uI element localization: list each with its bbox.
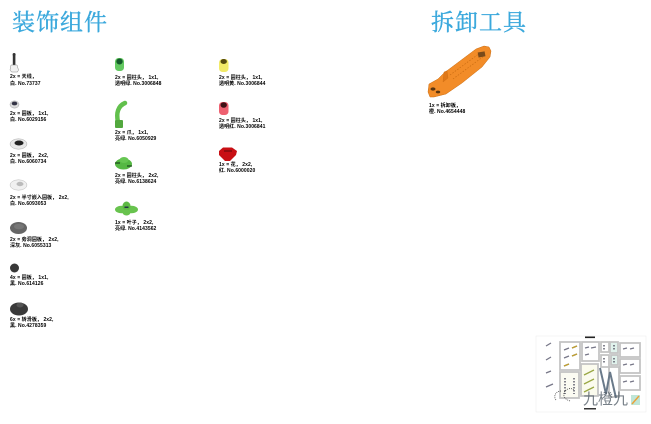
part: antenna: 2x = 天线， (10, 73, 37, 80)
part: transparent yellow cylinder: 2x = 圆柱头， 1x1, (219, 74, 263, 81)
part: bright green leaf (115, 202, 157, 232)
part: round plate 1x1: 2x = 圆板， 1x1, (10, 110, 49, 117)
part: orange brick separator tool: 橙. No.4654448 (429, 108, 465, 115)
thumbnail: parts overview page: 九橙九 (583, 391, 628, 408)
part: black sliding plate 2x2 (10, 302, 54, 329)
part: bright green flower plate 2x2: 亮绿. No.6138624 (115, 178, 157, 185)
part: bright green leaf: 亮绿. No.4143562 (115, 225, 157, 232)
part: transparent red cylinder: 透明红. No.3006841 (219, 123, 266, 130)
part: black sliding plate 2x2: 黑. No.4278359 (10, 323, 46, 329)
part: bright green arm (115, 103, 157, 142)
part: round plate 2x2 (10, 139, 49, 165)
part: bright green flower plate 2x2 (115, 157, 159, 185)
part: red flower 2x2: 1x = 花， 2x2, (219, 161, 253, 168)
part: orange brick separator tool (428, 46, 491, 115)
part: half-inset round plate 2x2 (10, 180, 69, 207)
part: black sliding plate 2x2: 6x = 转滑板， 2x2, (10, 316, 54, 323)
part: half-inset round plate 2x2: 白. No.6093053 (10, 200, 46, 207)
part: round plate 2x2: 2x = 圆板， 2x2, (10, 152, 49, 159)
thumbnail: parts overview page (536, 336, 646, 412)
part: red flower 2x2 (219, 148, 255, 174)
part: bright green arm: 亮绿. No.6050929 (115, 135, 157, 142)
part: black round plate 1x1: 黑. No.614126 (10, 281, 44, 287)
part: black round plate 1x1: 4x = 圆板， 1x1, (10, 274, 49, 281)
part: transparent red cylinder: 2x = 圆柱头， 1x1, (219, 117, 263, 124)
part: grooved round plate 2x2 (10, 222, 59, 249)
part: bright green flower plate 2x2: 2x = 圆柱头， 2x2, (115, 172, 159, 179)
part: orange brick separator tool: 1x = 拆卸板， (429, 102, 461, 109)
thumbnail panels (560, 342, 640, 398)
part: transparent yellow cylinder: 透明黄. No.3006844 (219, 80, 266, 87)
part: black round plate 1x1 (10, 264, 49, 287)
part: half-inset round plate 2x2: 2x = 半寸嵌入圆板， 2x2, (10, 194, 69, 201)
thumbnail parts (546, 343, 634, 394)
part: round plate 2x2: 白. No.6060734 (10, 158, 46, 165)
part: grooved round plate 2x2: 深灰. No.6055313 (10, 242, 52, 249)
part: antenna: 白. No.73737 (10, 80, 41, 87)
part: round plate 1x1: 白. No.6029156 (10, 116, 46, 123)
part: transparent green cylinder (115, 58, 162, 87)
part: transparent green cylinder: 透明绿. No.3006848 (115, 80, 162, 87)
heading: decoration parts: 装饰组件 (12, 10, 108, 35)
part: red flower 2x2: 红. No.6000020 (219, 167, 255, 174)
part: grooved round plate 2x2: 2x = 旁洞圆板， 2x2, (10, 236, 59, 243)
part: transparent yellow cylinder (219, 59, 266, 87)
part: bright green arm: 2x = 爪， 1x1, (115, 130, 149, 136)
heading: removal tool: 拆卸工具 (431, 10, 527, 35)
part: transparent green cylinder: 2x = 圆柱头， 1x1, (115, 74, 159, 81)
part: antenna (10, 53, 41, 87)
part: bright green leaf: 1x = 叶子， 2x2, (115, 219, 154, 226)
part: round plate 1x1 (10, 101, 49, 123)
part: transparent red cylinder (219, 102, 266, 130)
